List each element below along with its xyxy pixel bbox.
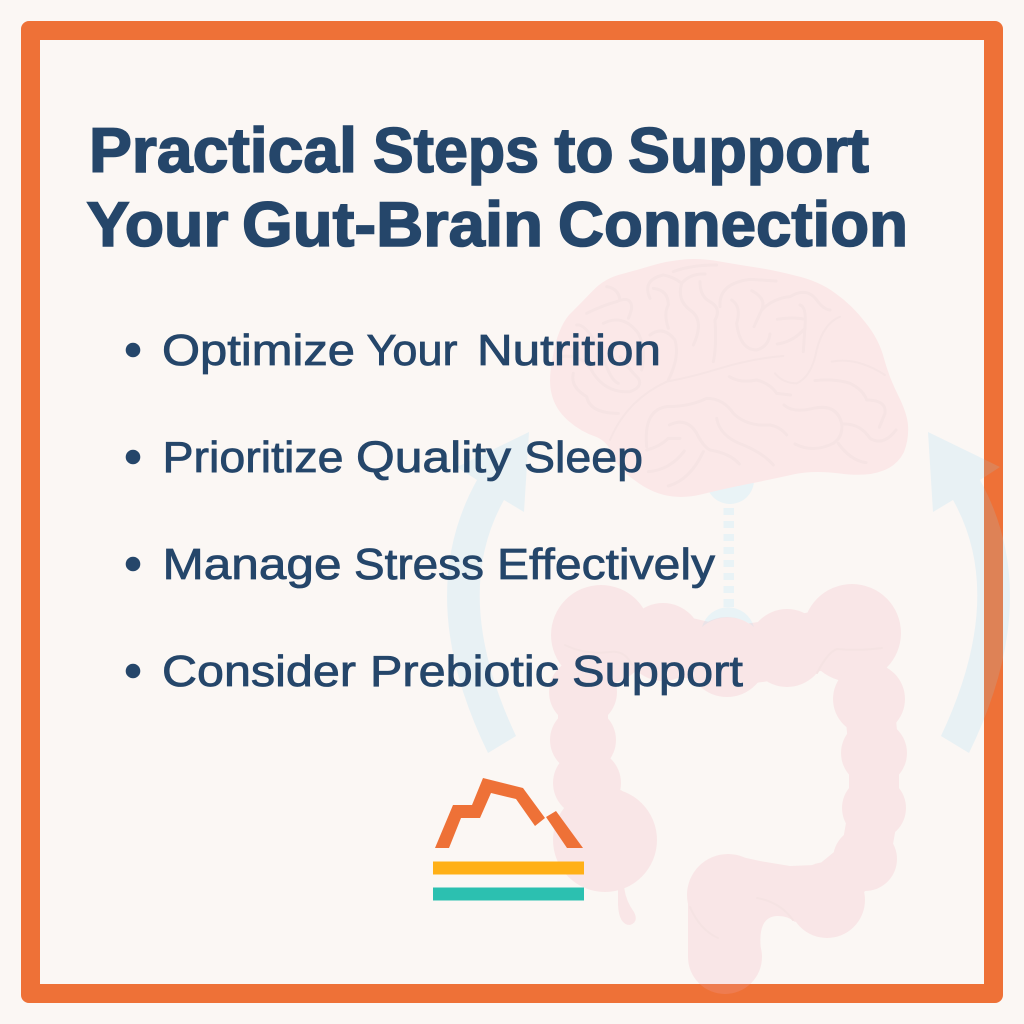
title: Gut-Brain	[242, 190, 543, 260]
title: Steps	[373, 116, 539, 186]
spinal connector	[702, 456, 754, 627]
bullet: nutrition: Nutrition	[477, 326, 661, 375]
brain folds	[560, 265, 896, 486]
icon: intestine	[549, 584, 907, 994]
title	[86, 116, 908, 260]
bullet: nutrition: Your	[366, 326, 458, 375]
arrow: left circular arrow	[447, 432, 529, 753]
bullet: sleep: Prioritize	[162, 433, 344, 482]
title: Connection	[558, 190, 908, 260]
logo: mountain and stripes	[433, 778, 584, 900]
bullet: stress: Effectively	[497, 540, 715, 589]
bullet list	[126, 326, 743, 696]
title: Support	[628, 116, 869, 186]
bullet: prebiotic	[126, 647, 743, 696]
title: to	[554, 116, 614, 186]
bullet: nutrition	[126, 326, 661, 375]
bullet: sleep: Sleep	[524, 433, 643, 482]
bullet: prebiotic: Consider	[162, 647, 356, 696]
bullet: prebiotic: Prebiotic	[370, 647, 559, 696]
icon: intestine creases	[565, 645, 882, 938]
icon: brain	[550, 259, 908, 497]
bullet: stress	[126, 540, 715, 589]
title: Your	[86, 190, 228, 260]
bullet: prebiotic: Support	[572, 647, 743, 696]
arrow: right circular arrow	[928, 432, 1010, 753]
bullet: sleep: Quality	[356, 433, 511, 482]
bullet: nutrition: Optimize	[162, 326, 355, 375]
bullet: stress: Stress	[354, 540, 484, 589]
bullet: stress: Manage	[162, 540, 342, 589]
illustration: gut-brain axis	[447, 259, 1010, 994]
bullet: sleep	[126, 433, 643, 482]
title: Practical	[89, 116, 357, 186]
